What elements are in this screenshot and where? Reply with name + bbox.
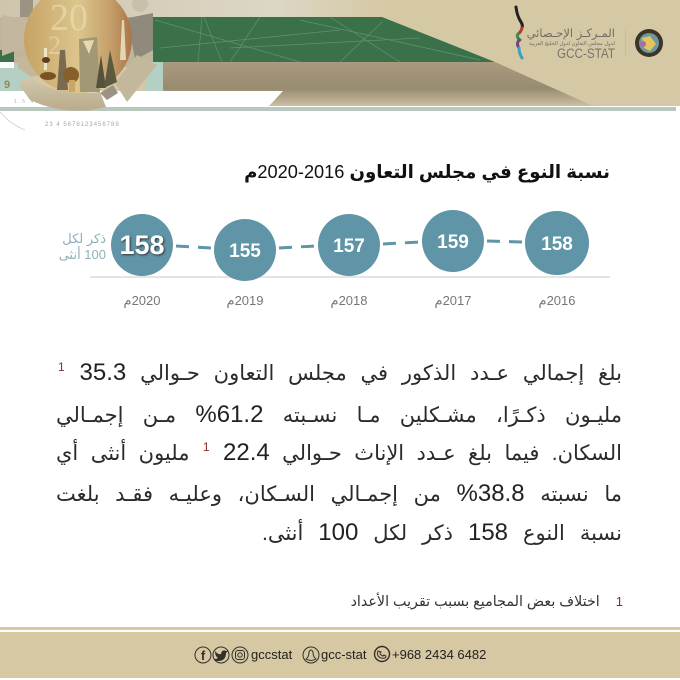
logo text: المـركـز الإحـصائي xyxy=(527,26,615,41)
footer bands xyxy=(0,627,680,680)
brown band xyxy=(163,62,593,106)
contact text: gcc-stat xyxy=(321,647,367,662)
point 2017: 2017م xyxy=(435,293,471,308)
body paragraph: بلغ إجمالي عـدد الذكور في مجلس التعاون حـوالي 35.3 1 xyxy=(58,359,622,386)
point 2017: 159 xyxy=(437,232,469,253)
footer contact row: f xyxy=(201,648,206,663)
header medallion: 2 xyxy=(48,31,61,60)
point 2017 xyxy=(422,210,484,308)
body paragraph: ما نسبته 38.8% من إجمـالي السـكان، وعليـه فقـد بلغت xyxy=(56,480,622,507)
logo text: لدول مجلس التعاون لدول الخليج العربية xyxy=(529,41,615,47)
point 2019: 2019م xyxy=(227,293,263,308)
GCC emblem xyxy=(635,29,663,57)
point 2018: 157 xyxy=(333,236,365,257)
point 2019: 155 xyxy=(229,241,261,262)
point 2016: 158 xyxy=(541,234,573,255)
social icons xyxy=(195,646,390,663)
point 2019 xyxy=(214,219,276,308)
point 2018: 2018م xyxy=(331,293,367,308)
body paragraph: مليـون ذكـرًا، مشـكلين مـا نسـبته 61.2% مـن إجمـالي xyxy=(56,401,622,428)
header medallion: 23 4 5678123456789 xyxy=(45,122,120,128)
point 2016 xyxy=(525,211,589,308)
header medallion xyxy=(0,0,157,130)
logo ribbon xyxy=(516,7,522,58)
point 2020 xyxy=(111,214,173,308)
header medallion: 1 5 4 7 8 2 3 6 xyxy=(14,99,76,105)
body paragraph xyxy=(56,359,622,546)
contact text xyxy=(251,647,486,662)
y unit label xyxy=(59,231,106,262)
point 2020: 158 xyxy=(119,230,165,260)
point 2020: 2020م xyxy=(124,293,160,308)
body paragraph: نسبة النوع 158 ذكر لكل 100 أنثى. xyxy=(262,519,622,546)
y unit label: ذكر لكل xyxy=(62,231,106,247)
y unit label: 100 أنثى xyxy=(59,246,106,262)
title: نسبة النوع في مجلس التعاون 2016-2020م xyxy=(244,162,610,182)
timeline chart xyxy=(59,210,610,308)
logo text xyxy=(527,26,626,61)
contact text: +968 2434 6482 xyxy=(392,647,486,662)
footnote: 1اختلاف بعض المجاميع بسبب تقريب الأعداد xyxy=(351,594,623,610)
point 2018 xyxy=(318,214,380,308)
logo text: GCC-STAT xyxy=(557,46,615,61)
point 2016: 2016م xyxy=(539,293,575,308)
green band xyxy=(153,17,495,62)
header banner xyxy=(0,0,680,130)
contact text: gccstat xyxy=(251,647,293,662)
header medallion: 9 xyxy=(4,79,10,91)
body paragraph: السكان. فيما بلغ عـدد الإناث حـوالي 22.4 1 مليون أنثى أي xyxy=(56,439,622,466)
